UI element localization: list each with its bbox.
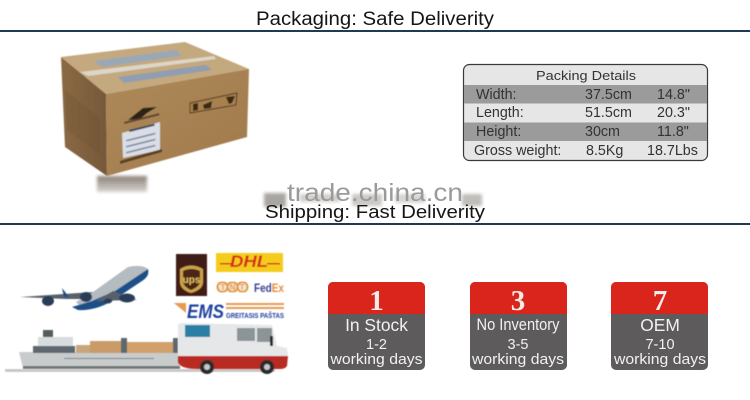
logo on box (128, 107, 157, 120)
row: length (476, 105, 690, 121)
row: length: 51.5cm (585, 105, 632, 121)
working days: working days (471, 351, 564, 368)
row: height: 11.8" (657, 124, 689, 140)
heading: packaging: Packaging: Safe Deliverity (256, 9, 495, 30)
row: width: 14.8" (657, 87, 690, 103)
logo: FedEx: FedEx (254, 281, 284, 295)
table heading: Packing Details (536, 68, 637, 83)
row: width (476, 87, 690, 103)
row: gross weight: Gross weight: (474, 143, 561, 159)
reflection fragments behind shipping heading (264, 193, 482, 207)
divider: packaging (0, 30, 750, 32)
logo: TNT: TNT (220, 283, 245, 292)
row: height: Height: (476, 124, 521, 140)
row: gross weight: 8.5Kg (586, 143, 623, 159)
label on box (122, 122, 160, 158)
card: no inventory (470, 282, 567, 370)
working days: working days (329, 351, 422, 368)
working days: working days (613, 351, 706, 368)
row: length: 20.3" (657, 105, 690, 121)
title: OEM (640, 315, 680, 335)
logo: EMS (174, 302, 284, 323)
number: 7 (653, 285, 667, 317)
handling symbols (190, 93, 237, 113)
number: 3 (511, 285, 525, 317)
illustration: cargo ship (19, 330, 180, 369)
heading: shipping: Shipping: Fast Deliverity (265, 202, 485, 222)
days: 3-5 (508, 337, 528, 353)
logo: EMS: GREITASIS PAŠTAS (226, 311, 284, 320)
card: in stock (328, 282, 425, 370)
row: gross weight (474, 143, 698, 159)
divider: shipping (0, 223, 750, 225)
days: 1-2 (366, 337, 387, 353)
illustration: airplane (20, 266, 148, 310)
title: In Stock (345, 315, 408, 335)
row: height (476, 124, 689, 140)
card: OEM (611, 282, 708, 370)
row: gross weight: 18.7Lbs (647, 143, 698, 159)
illustration: delivery truck (178, 323, 288, 374)
illustration: carriers and transport (5, 252, 288, 374)
logo: DHL: DHL (230, 252, 268, 271)
row: width: 37.5cm (585, 87, 632, 103)
number: 1 (369, 285, 384, 317)
logo: EMS: EMS (187, 302, 224, 323)
days: 7-10 (645, 337, 675, 353)
ship shadow (5, 369, 275, 372)
table: packing details (464, 64, 708, 160)
watermark: trade.china.cn (287, 179, 463, 207)
row: width: Width: (476, 87, 517, 103)
row: length: Length: (476, 105, 524, 121)
photo: cardboard box (61, 42, 249, 176)
box reflection fragment (97, 176, 147, 192)
logo: DHL (216, 252, 283, 272)
row: height: 30cm (585, 124, 620, 140)
logo: UPS: ups (183, 275, 201, 286)
title: No Inventory (476, 316, 560, 334)
logo: UPS (176, 254, 207, 296)
